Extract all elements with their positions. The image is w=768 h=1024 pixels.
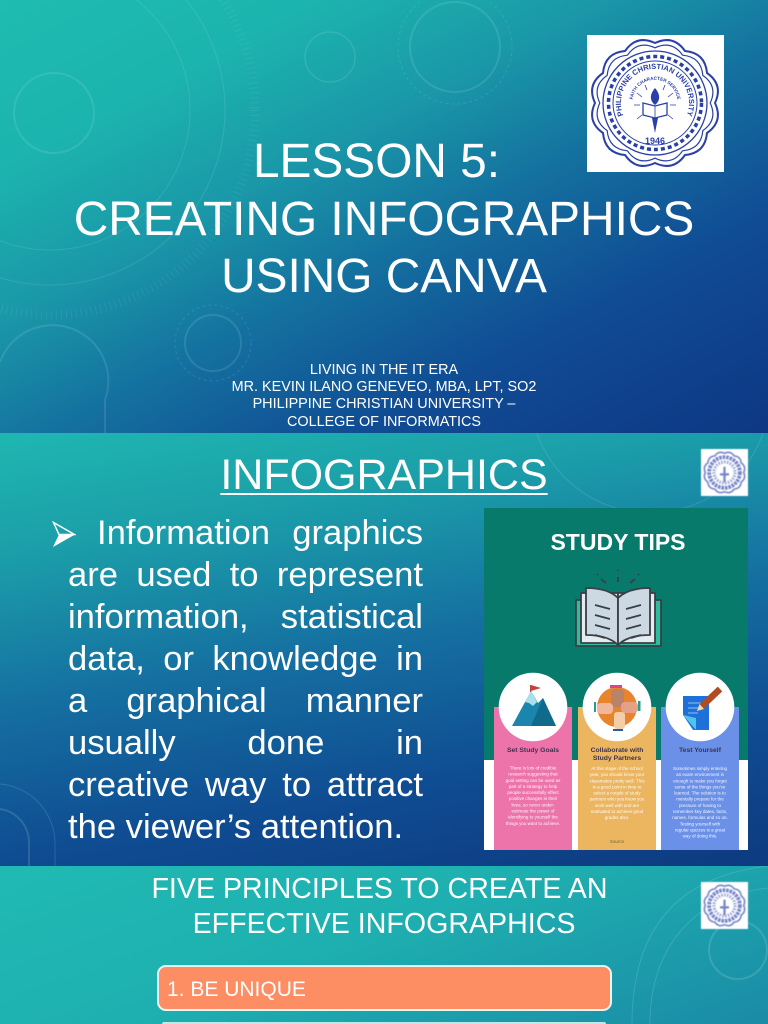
- text block: definition with bullet: in: [396, 640, 423, 678]
- text block: column copy: At this stage of the school: [591, 766, 643, 771]
- callout: next principle edge: [162, 1022, 606, 1024]
- text block: course details: [232, 362, 536, 430]
- text block: definition with bullet: to: [282, 766, 311, 804]
- text block: column copy: part of a strategy to help: [509, 784, 558, 789]
- text block: column copy: work well with and are: [595, 803, 640, 808]
- text block: definition with bullet: data,: [68, 640, 145, 678]
- text block: definition with bullet: attract: [327, 766, 423, 804]
- text block: column copy: motivated to achieve good: [591, 809, 644, 814]
- text block: column copy: grades also.: [605, 815, 629, 820]
- text block: column copy: enough to make you forget: [673, 778, 728, 783]
- icon: university seal large: PHILIPPINE CHRISTIAN UNIVERSITY: [616, 64, 694, 117]
- text block: column copy: Testing yourself with: [680, 821, 721, 826]
- text block: column copy: positive changes in their: [509, 796, 558, 801]
- heading: five principles: EFFECTIVE INFOGRAPHICS: [193, 908, 575, 940]
- text block: definition with bullet: graphical: [126, 682, 267, 720]
- heading: five principles: [151, 873, 608, 940]
- text block: column copy: remember key dates, facts,: [673, 809, 727, 814]
- text block: column headings: Collaborate with: [591, 747, 643, 754]
- icon: test paper and pencil: [683, 689, 720, 730]
- text block: column copy: some of the things you've: [675, 784, 726, 789]
- text block: definition with bullet: usually: [68, 724, 176, 762]
- text block: column copy: lives, so never under-: [511, 802, 555, 807]
- icon: university seal large: [587, 35, 724, 172]
- text block: column copy: names, formulas and so on.: [672, 815, 728, 820]
- panel: pink column: [494, 707, 572, 850]
- text block: definition with bullet: the viewer’s attention.: [68, 808, 403, 846]
- text block: definition with bullet: or: [163, 640, 194, 678]
- panel: infographics definition slide: [0, 433, 768, 866]
- text block: column copy: mentally prepare for the: [676, 797, 724, 802]
- text block: definition with bullet: [52, 514, 423, 846]
- text block: definition with bullet: information,: [68, 598, 249, 636]
- text block: column copy: things you want to achieve.: [506, 821, 560, 826]
- panel: title slide: [0, 0, 768, 433]
- panel: blue column: [661, 707, 739, 850]
- text block: definition with bullet: to: [230, 556, 259, 594]
- text block: definition with bullet: in: [396, 724, 423, 762]
- text block: column copy: pressure of having to: [679, 803, 722, 808]
- chart: study tips poster: [484, 508, 748, 850]
- text block: column copy: regular quizzes is a great: [675, 828, 726, 832]
- text block: column copy: an exam environment is: [676, 772, 725, 777]
- heading: lesson title: [74, 135, 694, 303]
- text block: definition with bullet: graphics: [292, 514, 423, 552]
- text block: column copy: estimate the power of: [511, 808, 555, 814]
- text block: course details: PHILIPPINE CHRISTIAN UNIVERSITY –: [253, 396, 515, 412]
- heading: lesson title: CREATING INFOGRAPHICS: [74, 192, 694, 246]
- text block: definition with bullet: represent: [277, 556, 423, 594]
- text block: column headings: Set Study Goals: [507, 747, 559, 754]
- heading: five principles: FIVE PRINCIPLES TO CREATE AN: [151, 873, 608, 905]
- text block: column copy: learned. The solution is to: [674, 791, 726, 796]
- text block: definition with bullet: are: [68, 556, 118, 594]
- text block: definition with bullet: creative: [68, 766, 189, 804]
- text block: column headings: Study Partners: [593, 755, 641, 762]
- text block: column copy: select a couple of study: [593, 791, 641, 796]
- icon: university seal large: 1946: [645, 136, 665, 146]
- icon: university seal small: [700, 448, 749, 497]
- icon: university seal large: FAITH CHARACTER SERVICE: [630, 76, 680, 100]
- icon: arrow bullet: [52, 521, 76, 547]
- text block: column copy: Sometimes simply entering: [673, 766, 728, 771]
- text block: course details: MR. KEVIN ILANO GENEVEO, MBA, LPT, SO2: [232, 379, 536, 395]
- text block: definition with bullet: statistical: [281, 598, 423, 636]
- icon: university seal small: [700, 881, 749, 930]
- callout: principle one: 1. BE UNIQUE: [167, 978, 306, 1001]
- text block: definition with bullet: way: [205, 766, 266, 804]
- text block: column headings: Test Yourself: [679, 747, 722, 754]
- text block: column copy: people successfully effect: [507, 790, 559, 795]
- text block: column copy: [506, 766, 728, 844]
- text block: definition with bullet: Information: [97, 514, 270, 552]
- text block: column copy: There is lots of credible: [510, 766, 557, 770]
- icon: hands on globe: [594, 685, 640, 731]
- text block: column copy: year, you should know your: [590, 772, 645, 777]
- panel: five principles slide: [0, 866, 768, 1024]
- text block: definition with bullet: done: [247, 724, 324, 762]
- text block: column copy: identifying to yourself the: [508, 815, 558, 820]
- text block: column copy: research suggesting that: [508, 772, 558, 777]
- text block: column headings: [507, 747, 722, 762]
- heading: infographics: INFOGRAPHICS: [220, 451, 548, 499]
- heading: study tips: STUDY TIPS: [550, 529, 686, 555]
- text block: column copy: way of doing this.: [683, 834, 717, 839]
- text block: definition with bullet: knowledge: [212, 640, 378, 678]
- text block: course details: LIVING IN THE IT ERA: [310, 362, 458, 378]
- heading: lesson title: USING CANVA: [221, 250, 547, 303]
- text block: definition with bullet: a: [68, 682, 87, 720]
- text block: column copy: partners who you know you: [590, 797, 645, 802]
- text block: column copy: goal setting can be used as: [506, 778, 561, 783]
- callout: principle one: [157, 965, 612, 1011]
- text block: definition with bullet: manner: [306, 682, 423, 720]
- icon: mountain flag: [512, 685, 556, 726]
- text block: column copy: is a good point in time to: [593, 784, 642, 789]
- heading: lesson title: LESSON 5:: [253, 135, 500, 188]
- icon: open book: [576, 570, 661, 646]
- text block: course details: COLLEGE OF INFORMATICS: [287, 414, 481, 430]
- text block: column copy: classmates pretty well. This: [590, 778, 645, 783]
- panel: orange column: [578, 707, 656, 850]
- text block: definition with bullet: used: [136, 556, 211, 594]
- text block: column copy: Source: [610, 839, 625, 844]
